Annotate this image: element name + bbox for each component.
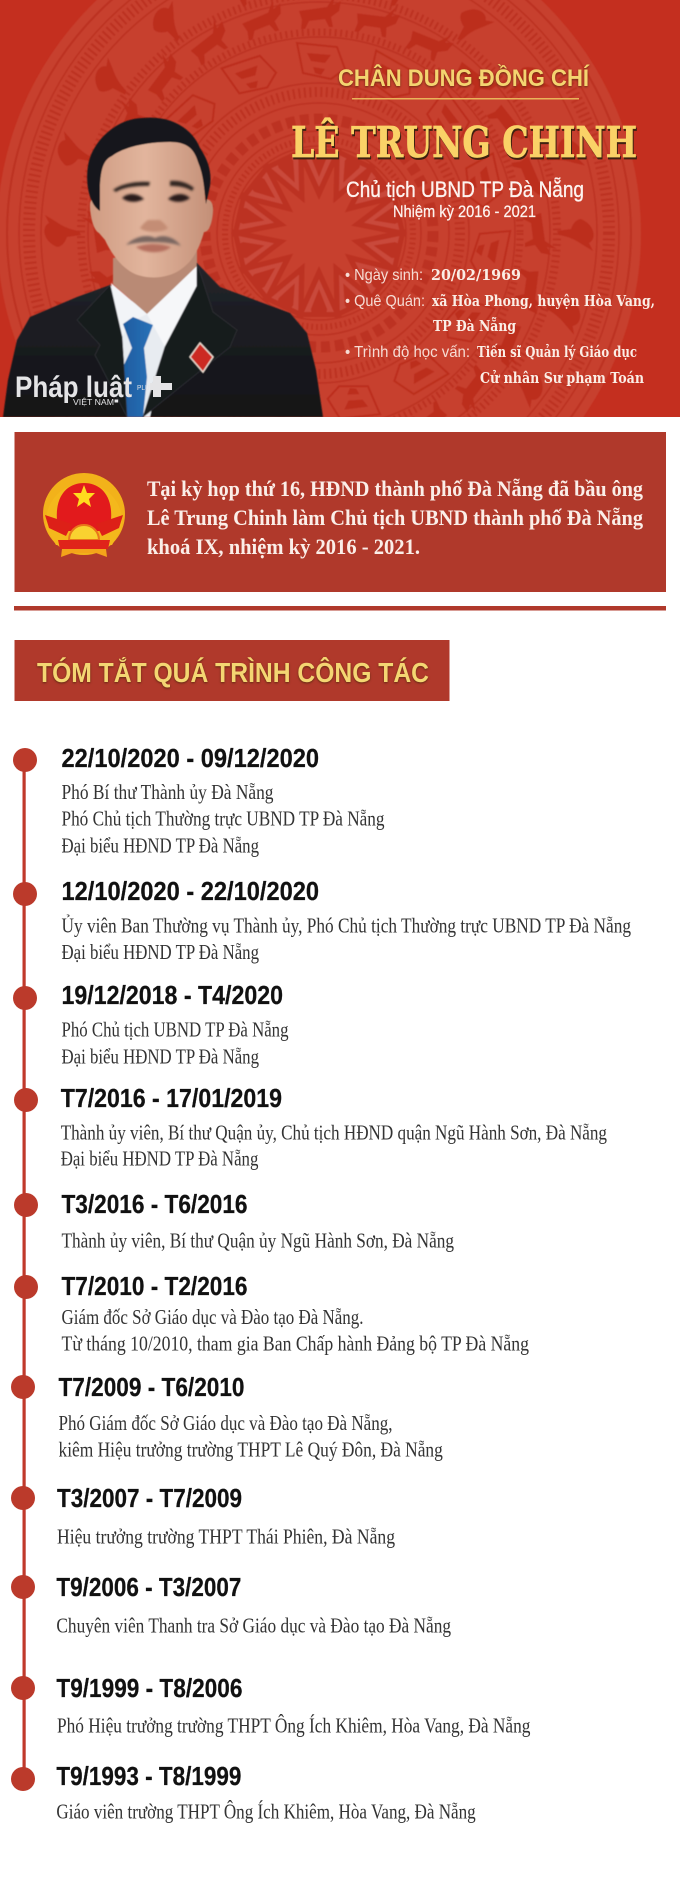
timeline spine <box>22 760 26 1779</box>
face <box>90 142 213 277</box>
heading background <box>14 640 450 701</box>
title underline <box>352 98 579 100</box>
date of birth: • Ngày sinh: <box>345 267 423 284</box>
hometown: TP Đà Nẵng <box>433 316 516 335</box>
hometown: • Quê Quán: <box>345 293 425 310</box>
entry T7/2010 - T2/2016: Từ tháng 10/2010, tham gia Ban Chấp hành Đảng bộ TP Đà Nẵng <box>62 1332 529 1356</box>
entry 19/12/2018 - T4/2020: 19/12/2018 - T4/2020 <box>62 980 283 1010</box>
heading text: TÓM TẮT QUÁ TRÌNH CÔNG TÁC <box>37 656 429 688</box>
panel: section heading <box>14 640 450 701</box>
portrait photo <box>3 118 323 417</box>
title: Chân dung đồng chí: CHÂN DUNG ĐỒNG CHÍ <box>338 64 590 92</box>
logo plus sign <box>150 376 172 397</box>
entry T9/2006 - T3/2007: T9/2006 - T3/2007 <box>56 1572 241 1602</box>
position: Chủ tịch UBND TP Đà Nẵng <box>346 177 584 202</box>
eyes <box>122 194 190 202</box>
bronze drum pattern <box>0 0 641 417</box>
entry T7/2010 - T2/2016: T7/2010 - T2/2016 <box>62 1271 248 1301</box>
entry T3/2007 - T7/2009: Hiệu trưởng trường THPT Thái Phiên, Đà Nẵng <box>57 1524 395 1548</box>
term: Nhiệm kỳ 2016 - 2021 <box>393 203 536 221</box>
shirt <box>110 285 166 417</box>
logo wordmark: Pháp luật <box>15 371 132 404</box>
banner text: khoá IX, nhiệm kỳ 2016 - 2021. <box>147 534 420 559</box>
entry T3/2016 - T6/2016 <box>14 1189 454 1252</box>
jacket <box>3 263 323 417</box>
entry T9/2006 - T3/2007: Chuyên viên Thanh tra Sở Giáo dục và Đào tạo Đà Nẵng <box>56 1613 451 1637</box>
entry 19/12/2018 - T4/2020: Phó Chủ tịch UBND TP Đà Nẵng <box>62 1018 289 1042</box>
entry T7/2010 - T2/2016 <box>14 1271 529 1356</box>
hometown <box>345 292 655 335</box>
nose <box>140 220 168 232</box>
entry T9/1999 - T8/2006 <box>11 1673 531 1738</box>
eyebrows <box>113 181 194 192</box>
neck <box>113 245 197 314</box>
facial features <box>113 181 194 252</box>
entry T7/2016 - 17/01/2019: Đại biểu HĐND TP Đà Nẵng <box>61 1147 259 1171</box>
entry T9/1993 - T8/1999: Giáo viên trường THPT Ông Ích Khiêm, Hòa Vang, Đà Nẵng <box>56 1799 476 1823</box>
entry 22/10/2020 - 09/12/2020 <box>13 743 385 857</box>
mouth <box>136 244 171 252</box>
entry T7/2009 - T6/2010: T7/2009 - T6/2010 <box>58 1372 244 1402</box>
date of birth <box>346 268 520 284</box>
banner background <box>14 432 666 592</box>
entry T7/2016 - 17/01/2019 <box>14 1083 607 1171</box>
entry 12/10/2020 - 22/10/2020 <box>13 876 631 964</box>
logo plus label: PLUS <box>137 385 154 392</box>
entry 22/10/2020 - 09/12/2020: Phó Chủ tịch Thường trực UBND TP Đà Nẵng <box>62 807 385 831</box>
left lapel <box>77 285 127 417</box>
entry T7/2009 - T6/2010: Phó Giám đốc Sở Giáo dục và Đào tạo Đà Nẵng, <box>58 1411 392 1435</box>
panel: election banner <box>14 432 666 592</box>
hair <box>87 118 211 211</box>
date of birth: 20/02/1969 <box>431 266 521 284</box>
entry T7/2009 - T6/2010 <box>11 1372 443 1462</box>
entry 19/12/2018 - T4/2020 <box>13 980 289 1068</box>
entry 22/10/2020 - 09/12/2020: 22/10/2020 - 09/12/2020 <box>62 743 319 773</box>
entry T9/2006 - T3/2007 <box>11 1572 451 1637</box>
panel: header <box>0 0 680 417</box>
banner text <box>147 476 644 559</box>
lapel pin <box>190 343 213 372</box>
entry 22/10/2020 - 09/12/2020: Phó Bí thư Thành ủy Đà Nẵng <box>62 780 274 804</box>
education <box>345 343 644 387</box>
entry T3/2007 - T7/2009 <box>11 1483 395 1548</box>
banner text: Lê Trung Chinh làm Chủ tịch UBND thành phố Đà Nẵng <box>147 505 644 530</box>
education: Cử nhân Sư phạm Toán <box>480 369 644 387</box>
right lapel <box>143 263 237 417</box>
entry T3/2016 - T6/2016: T3/2016 - T6/2016 <box>62 1189 248 1219</box>
entry 12/10/2020 - 22/10/2020: Đại biểu HĐND TP Đà Nẵng <box>62 940 259 964</box>
education: • Trình độ học vấn: <box>345 344 470 361</box>
moustache <box>126 236 181 246</box>
logo subline: VIỆT NAM <box>73 398 114 407</box>
entry 19/12/2018 - T4/2020: Đại biểu HĐND TP Đà Nẵng <box>62 1044 259 1068</box>
icon: national emblem <box>43 473 125 557</box>
education: Tiến sĩ Quản lý Giáo dục <box>477 343 637 361</box>
entry T9/1999 - T8/2006: T9/1999 - T8/2006 <box>56 1673 242 1703</box>
profile facts <box>345 266 655 387</box>
entry T7/2009 - T6/2010: kiêm Hiệu trưởng trường THPT Lê Quý Đôn, Đà Nẵng <box>58 1438 443 1462</box>
entry T9/1993 - T8/1999 <box>11 1761 476 1823</box>
timeline <box>11 743 631 1823</box>
entry T3/2007 - T7/2009: T3/2007 - T7/2009 <box>57 1483 242 1513</box>
entry T7/2010 - T2/2016: Giám đốc Sở Giáo dục và Đào tạo Đà Nẵng. <box>62 1305 364 1329</box>
entry T7/2016 - 17/01/2019: T7/2016 - 17/01/2019 <box>61 1083 282 1113</box>
tie <box>120 317 153 417</box>
entry T9/1999 - T8/2006: Phó Hiệu trưởng trường THPT Ông Ích Khiêm, Hòa Vang, Đà Nẵng <box>57 1714 531 1738</box>
logo: Pháp luật Plus <box>16 374 172 406</box>
shirt collar <box>111 265 198 347</box>
header red background <box>0 0 680 417</box>
entry T9/1993 - T8/1999: T9/1993 - T8/1999 <box>56 1761 241 1791</box>
entry 22/10/2020 - 09/12/2020: Đại biểu HĐND TP Đà Nẵng <box>62 833 259 857</box>
entry 12/10/2020 - 22/10/2020: 12/10/2020 - 22/10/2020 <box>62 876 319 906</box>
entry T3/2016 - T6/2016: Thành ủy viên, Bí thư Quận ủy Ngũ Hành Sơn, Đà Nẵng <box>62 1228 454 1252</box>
